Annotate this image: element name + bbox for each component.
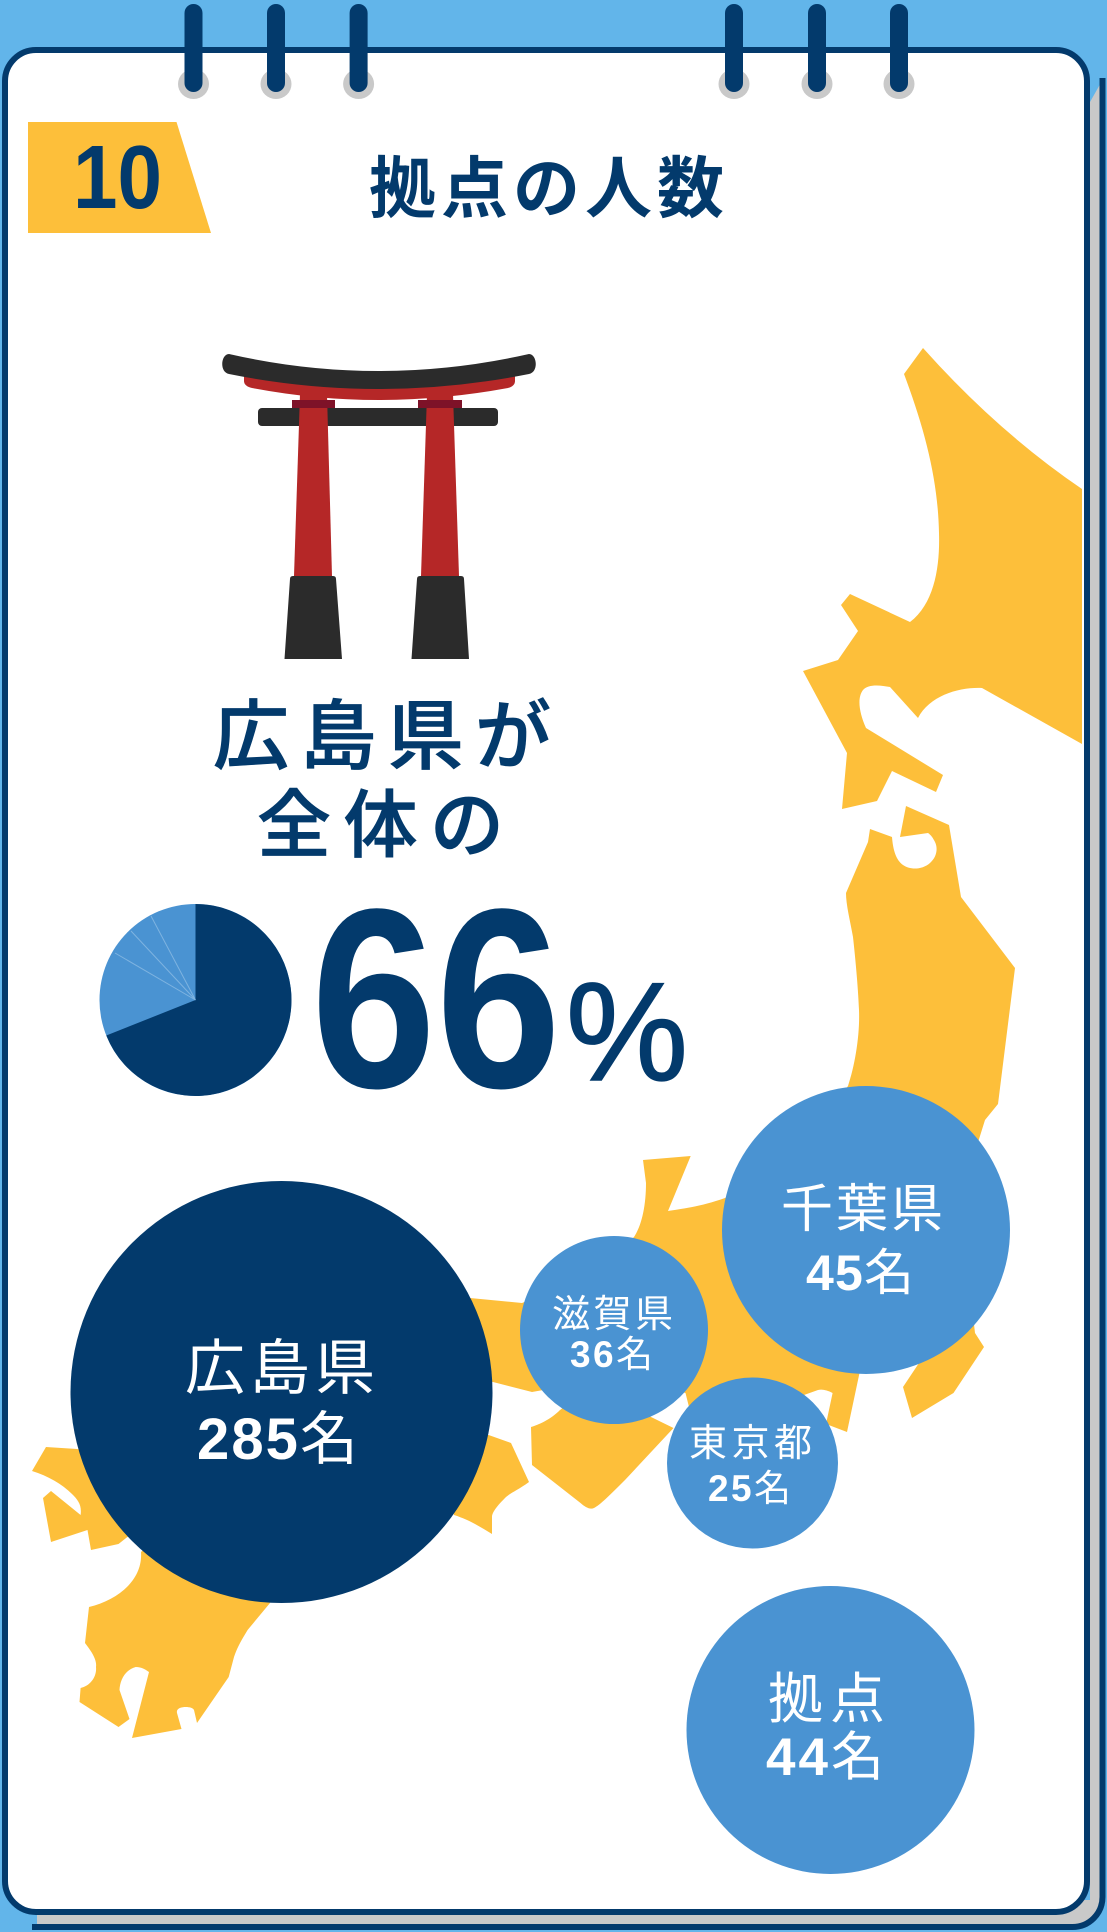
bubble: 滋賀県 36名 xyxy=(520,1236,708,1424)
bubble: 広島県 285名: 広島県 xyxy=(185,1335,375,1402)
map: Honshu xyxy=(440,806,1015,1450)
heading: 広島県が全体の xyxy=(213,695,551,867)
icon: torii gate xyxy=(222,354,536,659)
big number: 66%: % xyxy=(566,953,688,1110)
map: Kyushu xyxy=(80,1500,300,1738)
number badge: 10 xyxy=(73,128,162,228)
bubble: 拠点 44名: 拠点 xyxy=(768,1668,885,1730)
bubble: 東京都 25名: 25名 xyxy=(708,1468,791,1509)
title: 拠点の人数 xyxy=(369,152,724,227)
map of Japan xyxy=(32,348,1082,1738)
bubble: 滋賀県 36名: 滋賀県 xyxy=(552,1294,673,1336)
bubble: 千葉県 45名: 千葉県 xyxy=(781,1181,943,1239)
ring wires xyxy=(184,4,908,92)
bubble: 広島県 285名 xyxy=(70,1181,492,1603)
bubble: 拠点 44名: 44名 xyxy=(766,1728,884,1787)
number badge xyxy=(28,122,211,233)
heading: 広島県が全体の: 広島県が xyxy=(213,695,551,780)
bubble: 千葉県 45名 xyxy=(722,1086,1010,1374)
map: Hokkaido xyxy=(803,348,1082,809)
big number: 66%: 66 xyxy=(311,856,561,1142)
map: Kii peninsula xyxy=(531,1380,674,1509)
bubble: 千葉県 45名: 45名 xyxy=(806,1245,914,1301)
bubble: 滋賀県 36名: 36名 xyxy=(570,1334,653,1375)
bubble: 拠点 44名 xyxy=(686,1586,974,1874)
map: western Honshu tip xyxy=(32,1447,200,1550)
bubble: 東京都 25名: 東京都 xyxy=(689,1423,812,1465)
heading: 広島県が全体の: 全体の xyxy=(257,784,504,867)
bubble: 東京都 25名 xyxy=(667,1378,838,1548)
bubble: 広島県 285名: 285名 xyxy=(197,1407,358,1472)
spiral rings xyxy=(178,4,914,99)
pie chart xyxy=(100,904,292,1096)
map: Shikoku xyxy=(440,1435,529,1534)
ring holes xyxy=(178,69,914,99)
